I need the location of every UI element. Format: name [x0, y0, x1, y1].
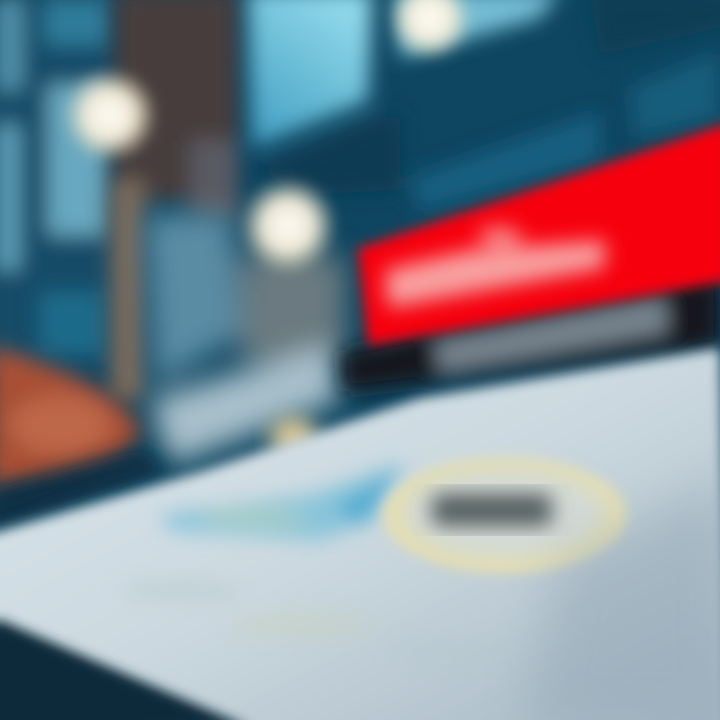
faint chart rows on paper [120, 582, 510, 658]
dark desk edge bottom left [0, 620, 250, 720]
icon: warm spot at desk [269, 416, 317, 456]
dark shelf under banner [340, 275, 720, 392]
background: monitor and desk items [145, 212, 345, 465]
light: ceiling lamp top [388, 0, 472, 60]
background: left windows [0, 0, 115, 370]
light: ceiling lamp centre [238, 176, 338, 276]
panel: red banner [358, 122, 720, 345]
callout: cream circle with percent [383, 457, 627, 573]
chart: blue streak [160, 462, 405, 540]
background: upper windows [248, 0, 720, 212]
shaded right corner of paper [520, 480, 720, 720]
panel: white paper [0, 348, 720, 720]
blurred banner lettering [385, 228, 605, 308]
background: brown pillar [110, 0, 238, 400]
panel: hand [0, 345, 138, 490]
blurred figure [432, 494, 552, 526]
shadow under hand [0, 450, 170, 530]
light: ceiling lamp left [62, 67, 158, 163]
